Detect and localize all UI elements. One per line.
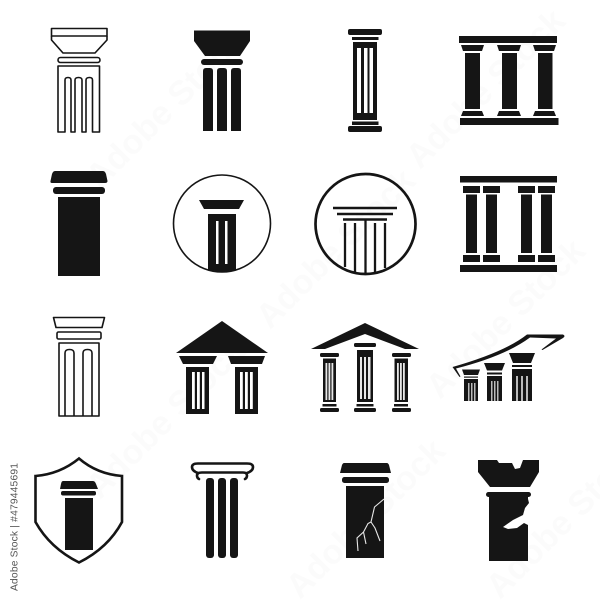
icon: temple with three columns [311, 323, 419, 412]
icon sheet: Adobe Stock [399, 2, 573, 176]
icon: shield with column [36, 458, 122, 562]
icon: cracked column [340, 463, 391, 558]
stock id caption: Adobe Stock | #479445691 [10, 463, 20, 591]
icon: solid fluted column [194, 30, 250, 131]
icon: rising columns chart [452, 334, 564, 401]
icon: three column colonnade [459, 36, 558, 125]
icon: slim column with white flutes [348, 29, 382, 132]
icon: line column in circle [316, 174, 416, 274]
icon: four column colonnade [460, 176, 557, 272]
icon sheet: Adobe Stock [79, 22, 253, 196]
icon: column in thin circle [174, 175, 270, 272]
icon sheet: Adobe Stock [79, 332, 253, 506]
icon sheet: Adobe Stock [249, 162, 423, 336]
icon: outline column with two flutes [54, 318, 104, 416]
icon: solid plain column [50, 171, 108, 276]
icon: curled capital column [192, 464, 253, 558]
icon sheet: Adobe Stock [419, 232, 593, 406]
icon: broken column [478, 460, 539, 561]
icon: outline fluted column [52, 28, 107, 132]
icon: temple with two columns [176, 321, 268, 414]
